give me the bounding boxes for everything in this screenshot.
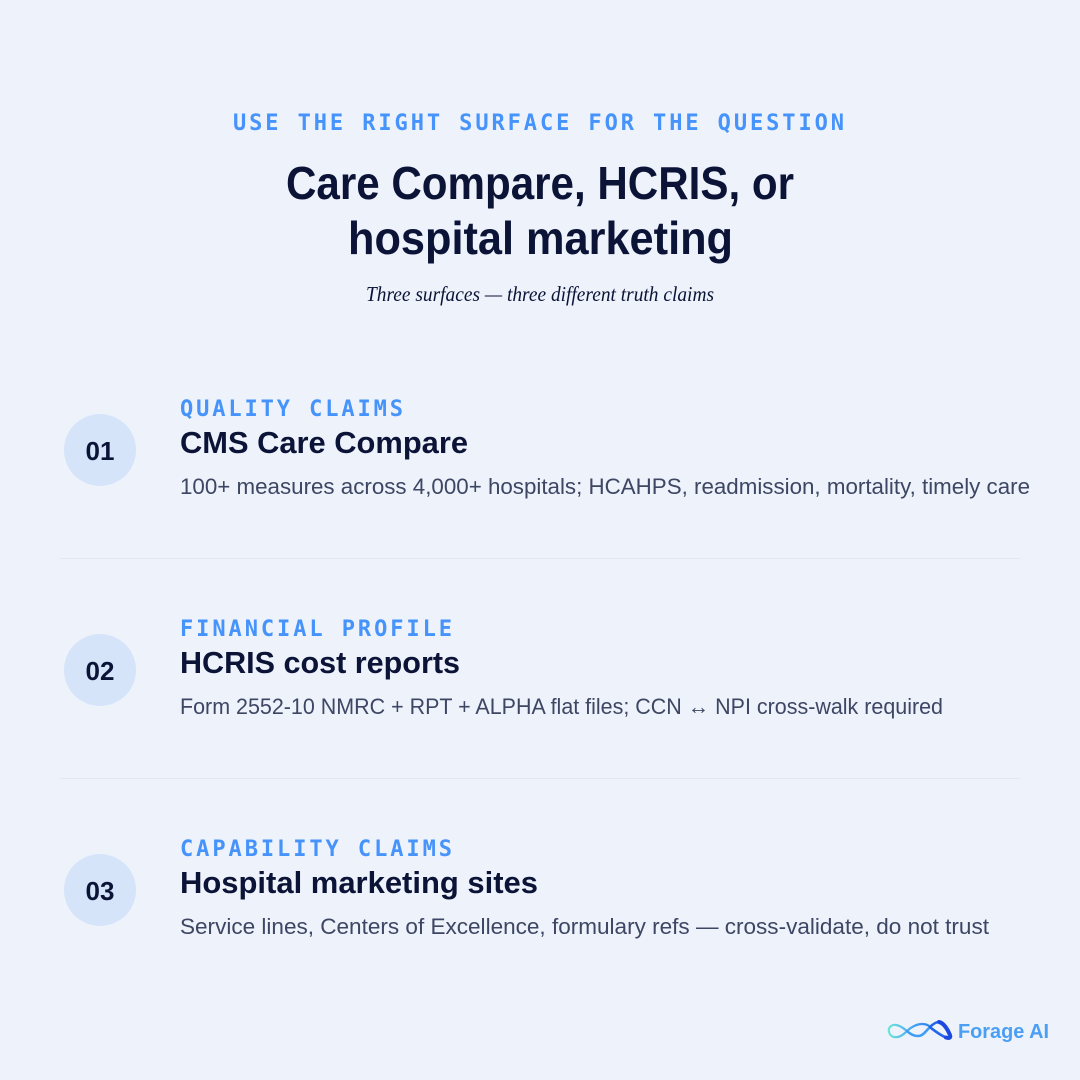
icon: infinity mark <box>889 1022 950 1038</box>
number badge 03: 03 <box>86 876 114 906</box>
title <box>286 157 794 264</box>
number badge 01: 01 <box>86 436 114 466</box>
logo: Forage AI <box>889 1021 1049 1043</box>
description: HCRIS cost reports: Form 2552-10 NMRC + RPT + ALPHA flat files; CCN ↔ NPI cross-walk required <box>180 694 943 719</box>
label: financial profile: FINANCIAL PROFILE <box>180 617 452 642</box>
title: hospital marketing <box>348 212 733 264</box>
heading: CMS Care Compare: CMS Care Compare <box>180 425 468 460</box>
eyebrow: USE THE RIGHT SURFACE FOR THE QUESTION <box>233 111 844 136</box>
subtitle: Three surfaces — three different truth claims <box>366 282 714 306</box>
row: Hospital marketing sites <box>64 837 989 939</box>
number badge 01 <box>64 414 136 486</box>
row: CMS Care Compare <box>64 397 1030 499</box>
number badge 02 <box>64 634 136 706</box>
number badge 03 <box>64 854 136 926</box>
label: capability claims: CAPABILITY CLAIMS <box>180 837 452 862</box>
label: quality claims: QUALITY CLAIMS <box>180 397 403 422</box>
heading: Hospital marketing sites: Hospital marketing sites <box>180 865 538 900</box>
number badge 02: 02 <box>86 656 114 686</box>
row: HCRIS cost reports <box>64 617 943 719</box>
title: Care Compare, HCRIS, or <box>286 157 794 209</box>
description: CMS Care Compare: 100+ measures across 4,000+ hospitals; HCAHPS, readmission, mortality, timely care <box>180 474 1030 499</box>
description: Hospital marketing sites: Service lines, Centers of Excellence, formulary refs — cross-validate, do not trust <box>180 914 989 939</box>
heading: HCRIS cost reports: HCRIS cost reports <box>180 645 460 680</box>
wordmark: Forage AI <box>958 1021 1049 1043</box>
